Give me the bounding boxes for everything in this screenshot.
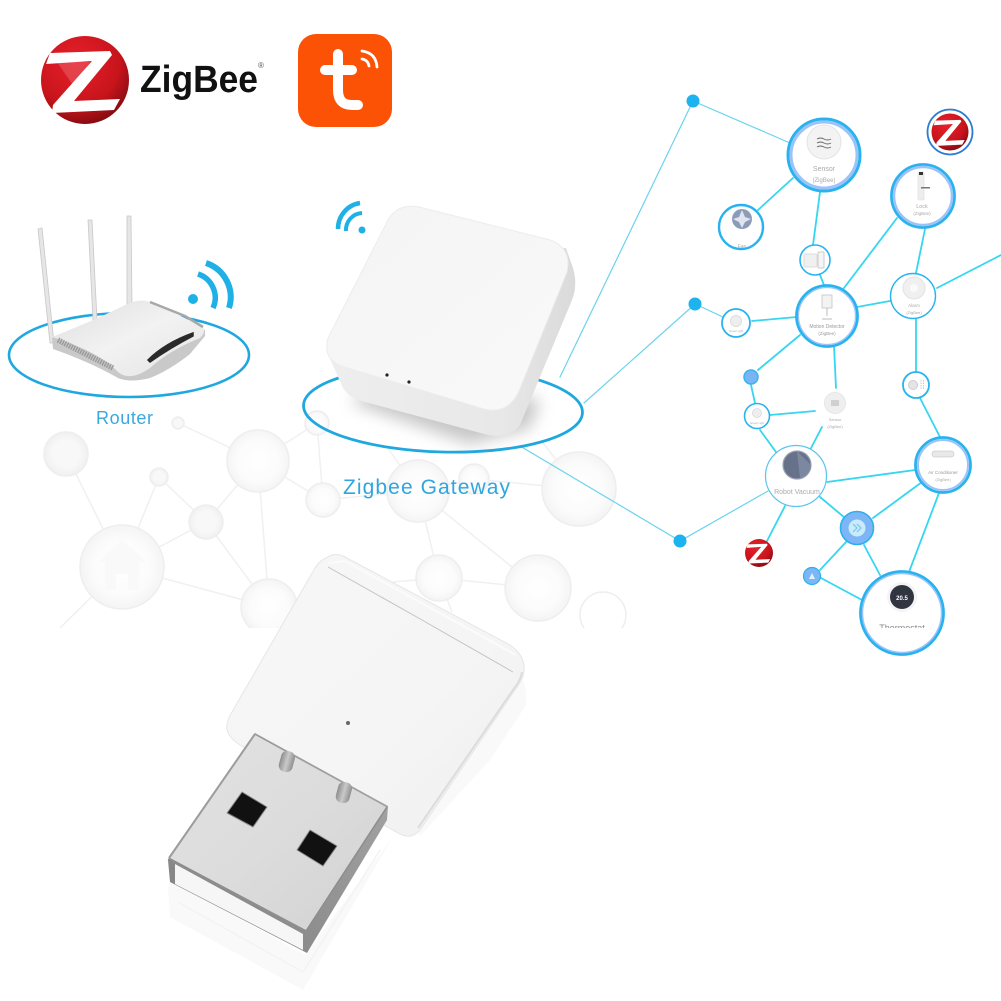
node: door sensor [800, 245, 830, 275]
node: Thermostat [860, 572, 944, 654]
node: small blue [804, 568, 820, 584]
node: Alarm [890, 274, 936, 318]
node: Sensor: (ZigBee) [812, 178, 836, 184]
label: Router: Router [96, 408, 154, 428]
node: bare Sensor: Sensor [829, 417, 842, 422]
node: Sensor [788, 119, 860, 191]
node: Motion Detector [796, 286, 858, 346]
router ring [9, 313, 249, 397]
node: Air Conditioner: (ZigBee) [935, 477, 951, 482]
node: Lock: Lock [916, 204, 928, 210]
node: Lock [892, 164, 954, 228]
node: small sensor light: Sensor Light [729, 330, 743, 333]
node: small plug [744, 404, 770, 428]
icon: ZigBee badge top right [928, 110, 972, 154]
node: blue hub [840, 512, 874, 544]
node: Lock: (ZigBee) [913, 211, 931, 216]
Tuya app icon [298, 34, 392, 127]
icon: router wifi signal [188, 263, 231, 308]
faint background network [44, 411, 626, 638]
reflection of USB dongle [168, 680, 526, 990]
node: Thermostat: Thermostat [879, 623, 925, 633]
node: bare Sensor: (ZigBee) [827, 424, 843, 429]
gateway ring [302, 362, 584, 456]
icon: Zigbee gateway [327, 206, 575, 444]
ZigBee logo [41, 36, 264, 124]
ZigBee logo: ® [258, 61, 264, 70]
node: Robot Vacuum [766, 446, 826, 506]
icon: gateway wifi signal [338, 203, 366, 234]
node: Sensor: Sensor [813, 166, 836, 173]
node: Air Conditioner [916, 438, 970, 492]
node: Robot Vacuum: Robot Vacuum [774, 489, 820, 496]
dots: link endpoints [674, 94, 758, 548]
node: Alarm: Alarm [908, 303, 920, 308]
node: Air Conditioner: Air Conditioner [928, 470, 958, 475]
icon: USB dongle body [227, 554, 524, 836]
node: Alarm: (ZigBee) [906, 310, 922, 315]
icon: USB plug metal [168, 733, 388, 953]
node: switch [903, 372, 929, 398]
node: Fan [719, 205, 763, 250]
node: bare Sensor [824, 392, 846, 429]
icon: ZigBee badge lower [745, 539, 773, 567]
label: Zigbee Gateway: Zigbee Gateway [343, 476, 510, 499]
node: Motion Detector: Motion Detector [809, 324, 845, 330]
node: small sensor light [722, 309, 750, 337]
node: small plug: Sensor Light [750, 422, 764, 425]
node: Fan: Fan [738, 244, 747, 250]
node: Thermostat: 20.5 [896, 596, 908, 602]
network links [520, 101, 1001, 600]
ZigBee logo: ZigBee [140, 59, 258, 101]
node: Motion Detector: (ZigBee) [818, 331, 836, 336]
icon: router [38, 216, 205, 380]
